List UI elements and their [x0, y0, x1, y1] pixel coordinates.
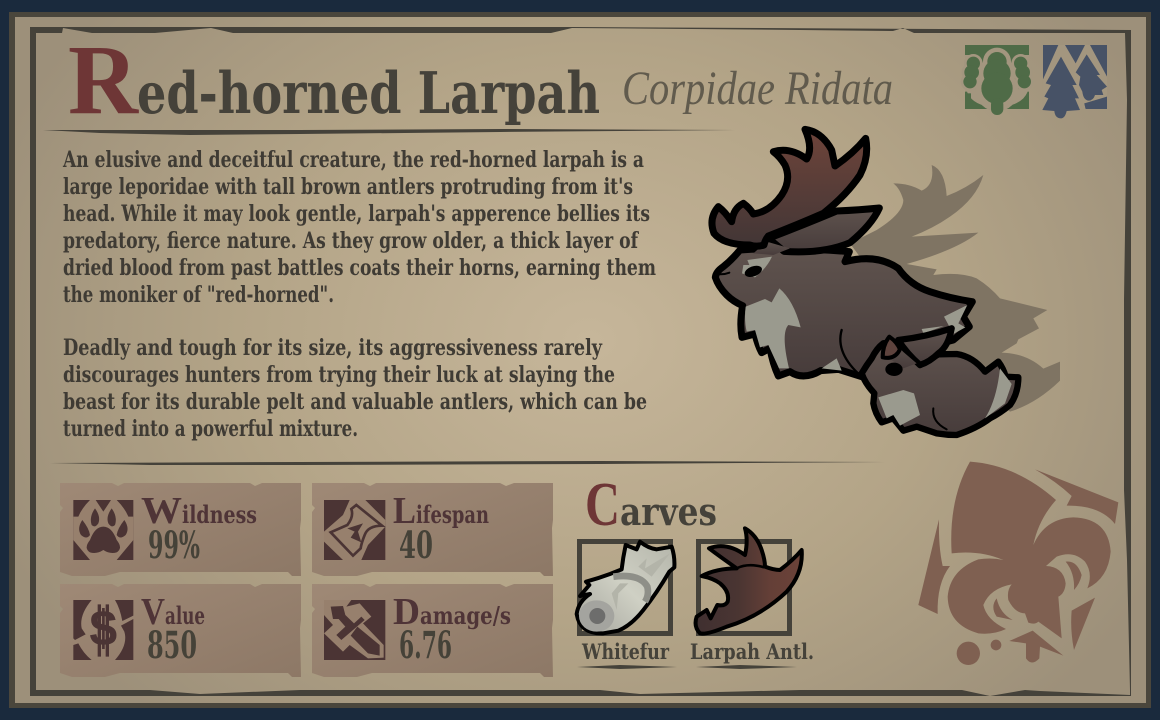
- stat label: W: [141, 490, 182, 532]
- adult antler: [712, 129, 867, 246]
- paragraph 1: An elusive and deceitful creature, the red-horned larpah is a: [62, 147, 644, 173]
- stat label: L: [393, 490, 416, 532]
- description text: [62, 147, 656, 442]
- creature shadow: [850, 165, 1060, 412]
- back pine: [1076, 54, 1107, 101]
- icon: antler: [696, 528, 802, 634]
- item underline: [696, 665, 797, 669]
- stat value: 40: [399, 523, 433, 567]
- stat label: ifespan: [416, 500, 489, 529]
- stat label: amage/s: [420, 601, 511, 630]
- tree outlines: [961, 54, 1034, 107]
- baby leg line: [933, 408, 947, 429]
- paragraph 1: dried blood from past battles coats their horns, earning them: [63, 255, 656, 281]
- baby eye: [885, 363, 903, 376]
- adult mouth: [717, 273, 729, 274]
- icon: pelt roll: [577, 542, 674, 633]
- paragraph 1: large leporidae with tall brown antlers protruding from it's: [63, 174, 633, 200]
- stat card: value: [60, 584, 301, 677]
- paragraph 2: Deadly and tough for its size, its aggressiveness rarely: [63, 335, 603, 361]
- title drop cap and name: R: [68, 24, 140, 135]
- paragraph 2: beast for its durable pelt and valuable antlers, which can be: [63, 389, 647, 415]
- stat card: damage: [312, 584, 553, 677]
- adult eye patch: [742, 257, 772, 277]
- pine base: [1084, 97, 1107, 109]
- stat value: 99%: [148, 523, 200, 567]
- right bar: [115, 600, 133, 621]
- title: [68, 24, 600, 135]
- emblem: fleur-de-lis: [918, 462, 1118, 665]
- scientific name: Corpidae Ridata: [622, 62, 893, 115]
- baby chest fur: [878, 390, 920, 426]
- adult larpah body: [715, 249, 972, 377]
- baby larpah: [862, 328, 1018, 435]
- item frame: [698, 542, 790, 634]
- icon: paw: [73, 500, 133, 560]
- paragraph 2: turned into a powerful mixture.: [63, 416, 358, 442]
- front pine: [1042, 57, 1080, 118]
- stat label: D: [393, 591, 420, 633]
- adult chest fur: [745, 288, 801, 368]
- side trees: [963, 57, 1031, 109]
- paragraph 1: predatory, fierce nature. As they grow older, a thick layer of: [63, 228, 639, 254]
- adult larpah ear: [768, 208, 879, 252]
- carve: whitefur: [577, 542, 677, 669]
- habitat icon: pines: [1042, 45, 1107, 118]
- creature illustration: [712, 129, 1060, 435]
- center tree: [981, 52, 1013, 115]
- icon: sword: [324, 600, 385, 660]
- stat value: 6.76: [399, 623, 452, 667]
- stat card: lifespan: [312, 483, 553, 576]
- left bar: [73, 600, 92, 640]
- dollar bars: [98, 604, 109, 657]
- baby tail fur: [985, 368, 1012, 418]
- item underline: [577, 665, 677, 669]
- icon: hourglass: [324, 500, 385, 560]
- carves heading: arves: [620, 489, 717, 534]
- carve: larpah antler: [690, 528, 814, 669]
- baby horn: [883, 337, 900, 358]
- paragraph 2: discourages hunters from trying their luck at slaying the: [63, 362, 615, 388]
- adult tail fur: [822, 305, 967, 371]
- item label: Larpah Antl.: [690, 639, 814, 664]
- adult eye: [743, 264, 763, 279]
- stat label: alue: [165, 601, 205, 630]
- stat value: 850: [147, 623, 197, 667]
- paragraph 1: [62, 147, 656, 308]
- adult leg line: [840, 330, 862, 377]
- stat card: wildness: [60, 483, 301, 576]
- icon: coin: [73, 600, 133, 660]
- paragraph 2: [63, 335, 647, 442]
- baby body: [862, 342, 1018, 435]
- item label: Whitefur: [581, 639, 670, 664]
- carves heading: C: [585, 471, 620, 539]
- center tree outline: [976, 48, 1018, 111]
- title divider: [43, 129, 735, 135]
- baby ear: [898, 328, 952, 365]
- dollar sign: $: [89, 601, 117, 657]
- pine outlines: [1043, 45, 1107, 109]
- habitat icon: forest: [961, 45, 1034, 115]
- divider: [50, 461, 885, 465]
- stat label: V: [141, 591, 165, 633]
- item frame: [580, 542, 670, 634]
- title drop cap and name: ed-horned Larpah: [137, 60, 600, 127]
- paragraph 1: head. While it may look gentle, larpah's apperence bellies its: [63, 201, 650, 227]
- stat label: ildness: [182, 500, 257, 529]
- paragraph 1: the moniker of "red-horned".: [63, 282, 334, 308]
